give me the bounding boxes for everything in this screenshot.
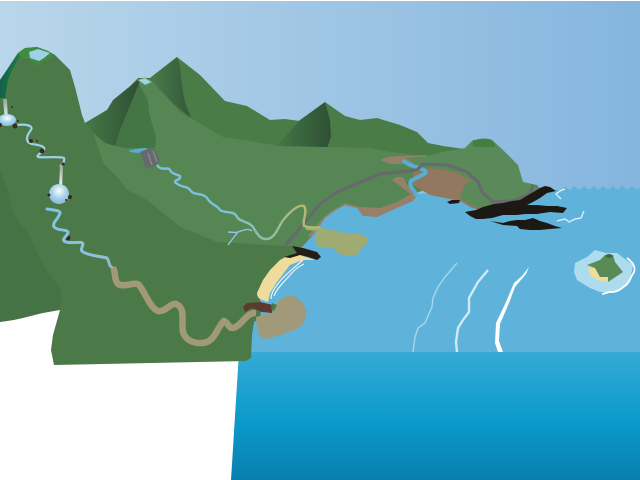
main river	[47, 209, 113, 268]
upper brown wetland	[380, 155, 432, 164]
second summit lake	[138, 78, 152, 85]
back mountain range	[85, 57, 470, 190]
olive sediment plume	[305, 226, 368, 256]
dam body	[140, 147, 160, 169]
island sand	[588, 268, 608, 282]
dark mountain face left	[85, 79, 139, 146]
deep ocean band	[231, 352, 640, 480]
lower left darker ridge	[0, 170, 61, 322]
middle slope with coast	[93, 80, 430, 250]
sky	[0, 1, 640, 196]
dark mountain face peak	[150, 57, 191, 118]
brown shoreline strip	[308, 193, 417, 238]
river tributary	[228, 229, 252, 245]
dam	[140, 147, 160, 169]
dam reservoir	[128, 148, 147, 153]
island lagoon halo	[574, 250, 633, 293]
lower pool	[49, 184, 69, 204]
headland crater	[473, 139, 495, 147]
summit lake	[29, 49, 50, 61]
front land	[0, 47, 300, 365]
coastal road	[285, 164, 533, 246]
lower waterfall	[59, 164, 63, 190]
right headland	[405, 139, 543, 211]
wave line medium	[456, 270, 488, 352]
reservoir river	[157, 165, 320, 239]
main river lower sediment reach	[113, 268, 256, 343]
medium mountain face	[115, 84, 156, 148]
black headland rock	[284, 246, 321, 260]
upper waterfall	[3, 99, 8, 122]
headland green	[405, 140, 543, 211]
island surf	[602, 258, 635, 294]
sandy beach	[257, 255, 315, 302]
upper pool	[0, 114, 16, 126]
boulders along the upper river	[0, 106, 72, 240]
surf lines on beach	[271, 260, 304, 299]
dark mudflat at mouth	[243, 302, 273, 313]
dam spillway	[148, 151, 157, 165]
headland river	[403, 160, 426, 196]
green tip near mouth	[271, 303, 277, 311]
dark teal mountain face	[0, 53, 20, 98]
dark mountain face right	[275, 102, 331, 148]
wave line bright	[495, 267, 529, 352]
wave line faint	[413, 263, 457, 352]
brown lowland	[413, 168, 481, 210]
black rocks	[447, 186, 567, 230]
brown delta patch	[392, 177, 415, 199]
river plume at mouth	[256, 296, 306, 339]
surf line by headland	[556, 189, 584, 222]
sea with wave crest horizon	[238, 185, 640, 352]
island crater	[606, 254, 612, 258]
island green	[587, 255, 623, 282]
upper river	[17, 125, 64, 167]
offshore island	[574, 250, 635, 294]
summit crater	[18, 47, 53, 66]
